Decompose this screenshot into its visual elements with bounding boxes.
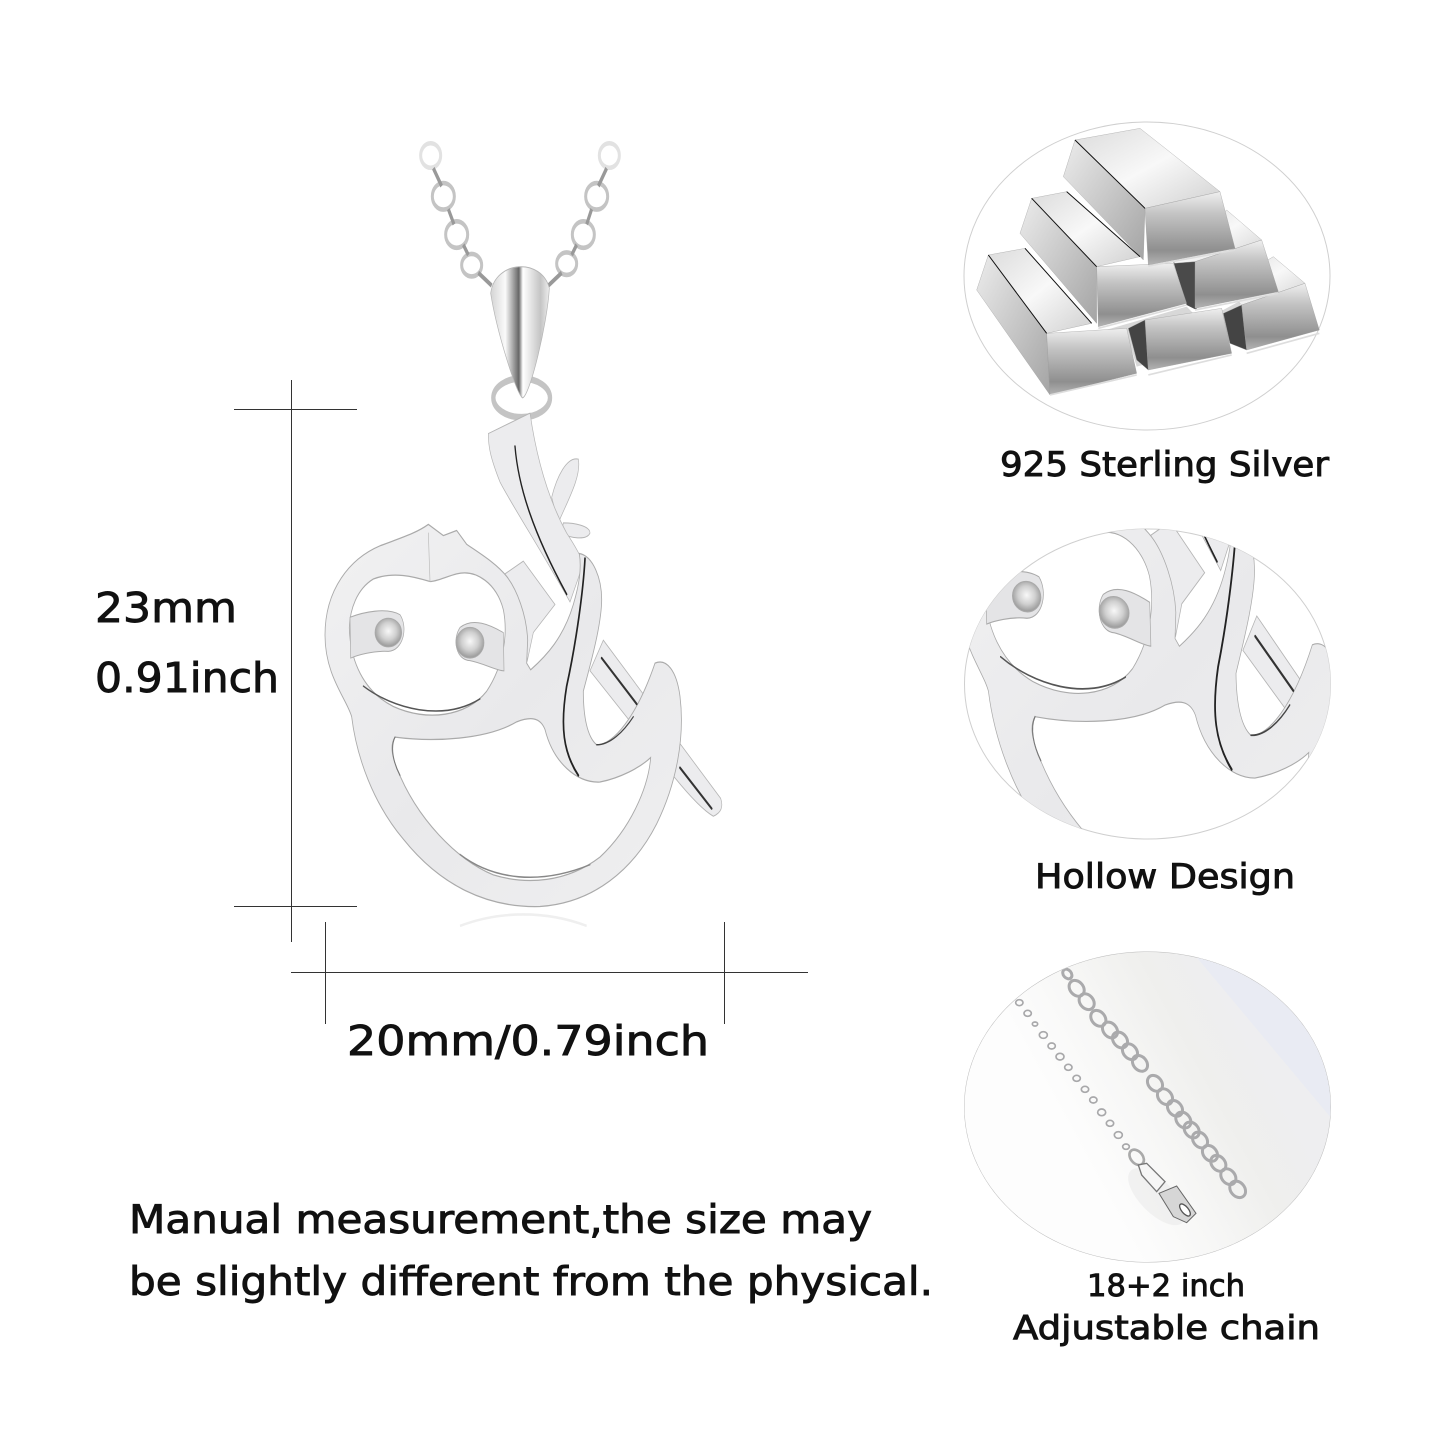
pendant necklace photo bbox=[325, 143, 722, 926]
paper background bbox=[960, 950, 1340, 1270]
label: Hollow Design: Hollow Design bbox=[1035, 857, 1295, 897]
bail bbox=[491, 267, 549, 398]
necklace chain bbox=[421, 143, 619, 286]
branch and leaves bbox=[488, 413, 722, 816]
label: 18+2 inch: 18+2 inch bbox=[1087, 1269, 1245, 1304]
sloth arms and eyes bbox=[350, 611, 504, 671]
label: 925 Sterling Silver: 925 Sterling Silver bbox=[1000, 445, 1329, 485]
height dimension bbox=[234, 380, 357, 942]
panel: silver bars bbox=[964, 122, 1330, 430]
width label: 20mm/0.79inch bbox=[347, 1017, 709, 1065]
lobster clasp bbox=[1128, 1148, 1197, 1225]
extender chain bbox=[1061, 967, 1249, 1201]
panel: hollow design close-up bbox=[964, 528, 1331, 840]
reflection bbox=[460, 914, 587, 926]
note: measurement disclaimer: be slightly different from the physical. bbox=[129, 1260, 933, 1305]
note: measurement disclaimer: Manual measurement,the size may bbox=[129, 1198, 872, 1243]
jump ring bbox=[493, 378, 550, 417]
width dimension bbox=[291, 922, 808, 1024]
close-up: sloth body bbox=[970, 529, 1330, 829]
panel: adjustable chain close-up bbox=[960, 950, 1340, 1270]
dimension lines bbox=[234, 380, 808, 1024]
note: measurement disclaimer bbox=[129, 1198, 933, 1305]
thin cable chain bbox=[1016, 1000, 1129, 1149]
icon: stacked silver ingots bbox=[977, 128, 1319, 395]
close-up: branch bbox=[1150, 529, 1300, 708]
engraved lines bbox=[363, 446, 712, 877]
label: Adjustable chain: Adjustable chain bbox=[1013, 1308, 1320, 1347]
close-up: eyes bbox=[985, 570, 1151, 646]
height label: 0.91inch: 0.91inch bbox=[95, 654, 279, 702]
height label: 23mm: 23mm bbox=[95, 584, 237, 632]
close-up: engraved lines bbox=[1000, 536, 1294, 771]
sloth body bbox=[325, 524, 681, 907]
